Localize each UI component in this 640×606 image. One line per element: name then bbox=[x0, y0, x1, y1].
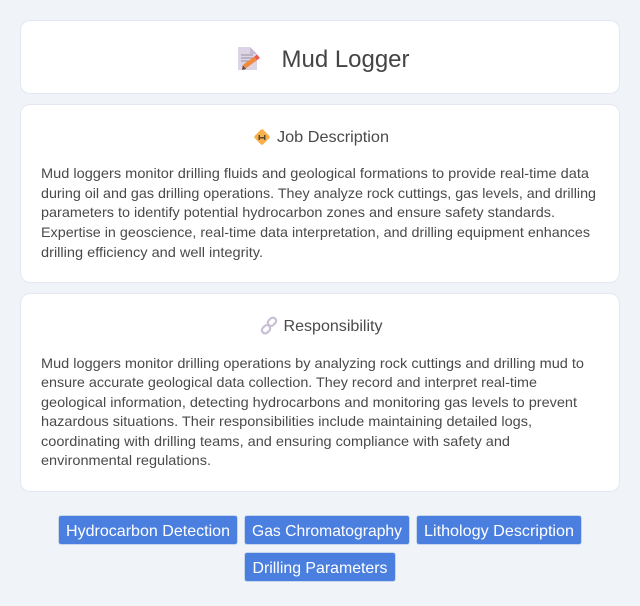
badge: gas chromatography: Gas Chromatography bbox=[252, 523, 402, 540]
text block: responsibility: hazardous situations. Their responsibilities include maintaining detailed logs, bbox=[41, 413, 532, 429]
badge: hydrocarbon detection: Hydrocarbon Detection bbox=[66, 523, 230, 540]
badge: hydrocarbon detection bbox=[58, 515, 238, 545]
panel: job description bbox=[20, 104, 620, 283]
text block: job description: during oil and gas drilling operations. They analyze rock cuttings, gas levels, and drilling bbox=[41, 185, 596, 201]
text block: responsibility: coordinating with drilling teams, and ensuring compliance with safety and bbox=[41, 433, 510, 449]
badge: lithology description bbox=[416, 515, 582, 545]
heading: responsibility: Responsibility bbox=[284, 318, 382, 335]
text block: job description: drilling efficiency and well integrity. bbox=[41, 244, 263, 260]
badge: drilling parameters: Drilling Parameters bbox=[252, 560, 388, 577]
panel: responsibility bbox=[20, 293, 620, 492]
text block: job description: parameters to identify potential hydrocarbon zones and ensure safety standards. bbox=[41, 204, 555, 220]
icon: document with pencil bbox=[238, 47, 260, 70]
text block: job description bbox=[41, 165, 596, 260]
text block: responsibility: Mud loggers monitor drilling operations by analyzing rock cuttings and drilling mud to bbox=[41, 355, 584, 371]
text block: job description: Mud loggers monitor drilling fluids and geological formations to provide real-time data bbox=[41, 165, 589, 181]
text block: responsibility: environmental regulations. bbox=[41, 452, 211, 468]
badge: lithology description: Lithology Description bbox=[424, 523, 574, 540]
icon: chain link bbox=[260, 316, 278, 334]
text block: responsibility: geological information, detecting hydrocarbons and monitoring gas levels to prevent bbox=[41, 394, 577, 410]
badge: drilling parameters bbox=[244, 552, 396, 582]
panel: title card bbox=[20, 20, 620, 94]
text block: responsibility: ensure accurate geological data collection. They record and interpret real-time bbox=[41, 374, 537, 390]
icon: orange diamond sign bbox=[254, 129, 270, 145]
badge: gas chromatography bbox=[244, 515, 410, 545]
text block: job description: Expertise in geoscience, real-time data interpretation, and drilling equipment enhances bbox=[41, 224, 590, 240]
heading: job description: Job Description bbox=[277, 129, 389, 146]
title: Mud Logger bbox=[282, 46, 410, 73]
